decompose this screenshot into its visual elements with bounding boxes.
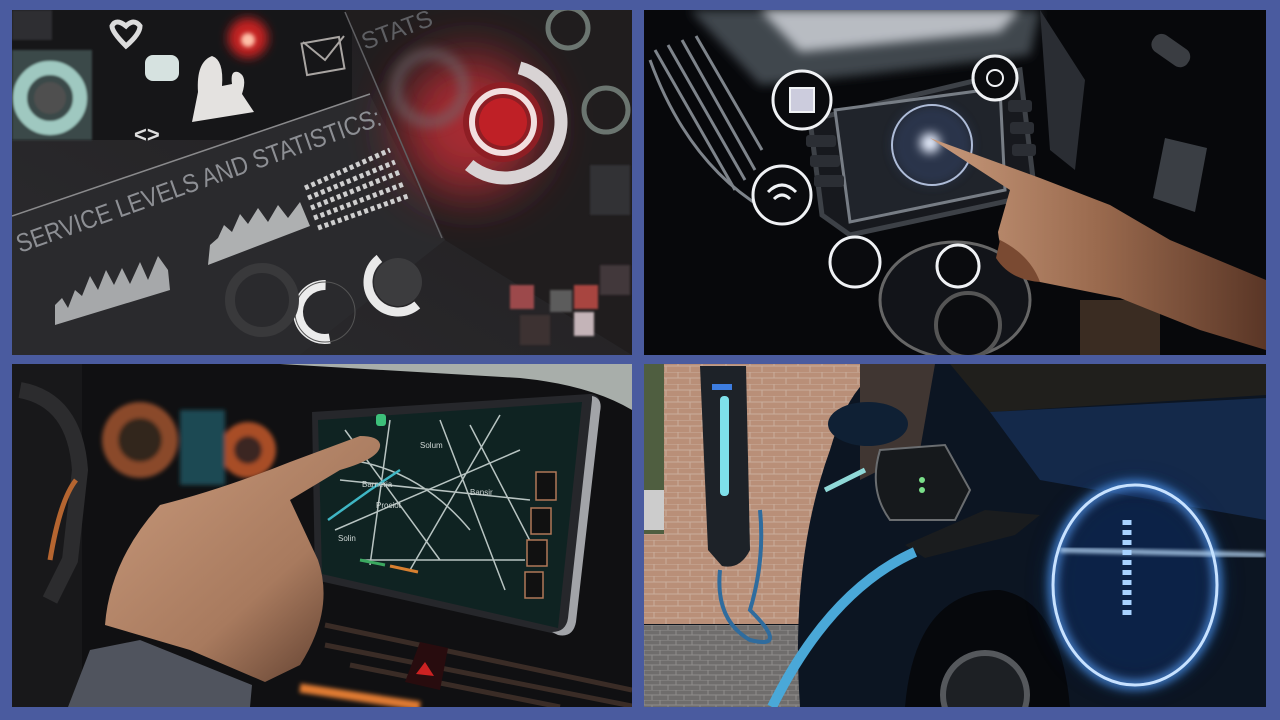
map labels: Prociot (376, 501, 402, 510)
glowing touch point (892, 105, 972, 185)
navigation display (312, 394, 600, 635)
bar chart: middle (208, 202, 310, 265)
icon: left ring (12, 50, 92, 140)
blue charging cable (772, 552, 915, 707)
wall charger (700, 366, 750, 567)
icon: people (192, 56, 254, 122)
map labels: Solin (338, 534, 356, 543)
right dark interior (1151, 34, 1190, 68)
map labels: Barneria (362, 480, 393, 489)
icon: heart (112, 22, 140, 46)
control dial (880, 242, 1030, 358)
sleeve (68, 640, 252, 707)
charging connector (905, 510, 1040, 558)
status bars (360, 560, 418, 572)
pixel blocks (12, 10, 630, 345)
instrument cluster (102, 402, 276, 485)
panel: navigation screen (12, 364, 632, 707)
heading: service levels: SERVICE LEVELS AND STATISTICS: (12, 102, 385, 259)
panel: EV charging (644, 364, 1266, 720)
green marker (376, 414, 386, 426)
icon: target ring (396, 53, 574, 191)
side mirror (828, 402, 908, 446)
control buttons (806, 100, 1036, 187)
panel: service levels and statistics dashboard (12, 5, 632, 355)
icon: envelope (302, 36, 344, 75)
panel: car infotainment touch (644, 10, 1266, 358)
hand pointing at map (105, 436, 380, 682)
hand pointing (930, 138, 1266, 350)
icon: chat bubble (145, 55, 179, 81)
map roads (335, 415, 540, 590)
red glow (400, 55, 540, 195)
heading: stats: STATS (358, 5, 436, 56)
pictogram grid (305, 150, 408, 228)
air vents (648, 35, 764, 204)
charger wall cable (719, 510, 770, 642)
icon: small rings (548, 8, 628, 132)
glowing charge ring (1050, 485, 1220, 685)
touchscreen (810, 70, 1035, 235)
dash trim lights (50, 480, 76, 560)
car-side emblem (825, 470, 865, 490)
screen side buttons (525, 472, 556, 598)
map labels: Bansir (470, 488, 493, 497)
car body (798, 364, 1266, 707)
hazard button (405, 642, 448, 690)
map labels: Solum (420, 441, 443, 450)
icon: code brackets: <> (134, 122, 160, 147)
paved ground (644, 625, 814, 707)
wheel arch and wheel (905, 590, 1070, 707)
icons: circular tech badges (753, 56, 1017, 287)
map labels (338, 441, 493, 543)
brick wall (644, 364, 874, 624)
donut charts (225, 254, 422, 344)
vent slats (325, 625, 632, 707)
charge port flap (876, 445, 970, 520)
bar chart: left (55, 256, 170, 325)
